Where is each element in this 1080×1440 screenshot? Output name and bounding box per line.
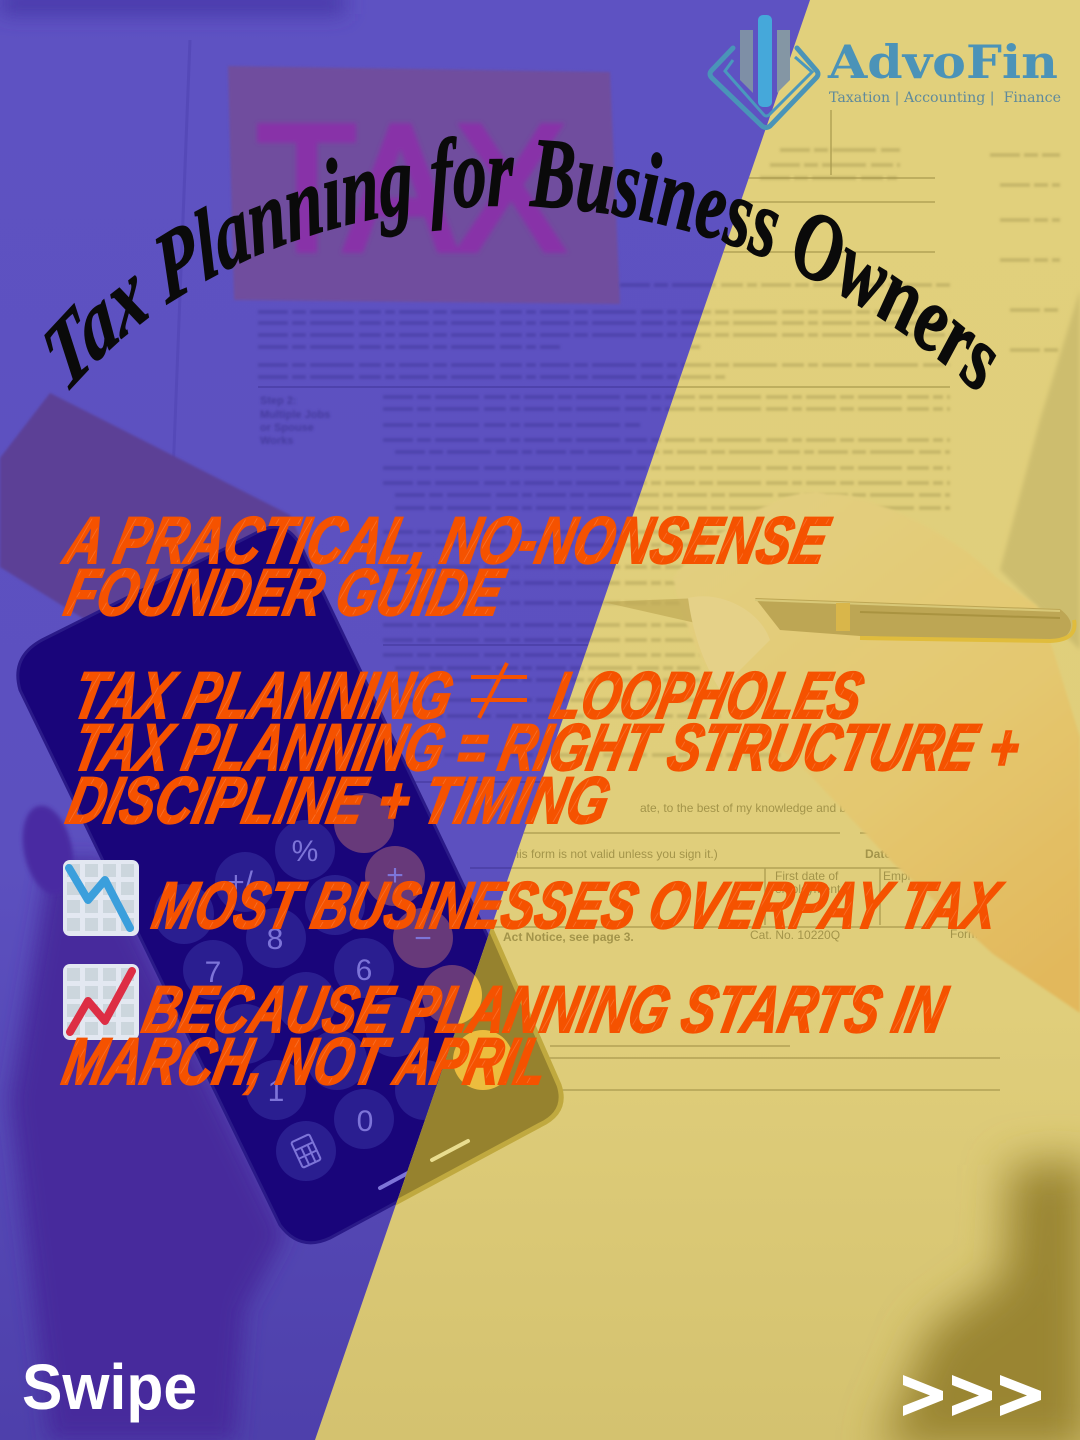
photo: form side labels <box>260 395 330 447</box>
icon: chart decreasing <box>63 860 139 936</box>
photo: form text: Empl <box>883 869 910 883</box>
logo mark <box>710 15 818 128</box>
photo: credit card <box>0 393 310 624</box>
photo: phone: 0 <box>357 1105 373 1138</box>
photo: shadow in corner <box>880 1160 1080 1440</box>
text block: tax planning definition: DISCIPLINE + TIMING <box>61 765 616 838</box>
photo: phone: 7 <box>205 956 221 989</box>
photo: form lines <box>258 283 712 757</box>
photo: phone: − <box>414 922 432 955</box>
panel: yellow photo side <box>315 0 1080 1440</box>
photo: form side labels: or Spouse <box>260 422 314 434</box>
icon: chart increasing <box>63 964 139 1040</box>
photo: form lines <box>560 148 1060 758</box>
photo: form text <box>503 801 978 944</box>
photo: phone edge <box>396 929 564 1206</box>
photo: form side labels: Works <box>260 435 293 447</box>
swipe label: Swipe <box>22 1351 197 1423</box>
photo: phone <box>16 526 488 1244</box>
panel: purple photo side <box>0 0 712 1440</box>
photo: tax sign: TAX <box>256 88 566 289</box>
text block: tax planning definition: LOOPHOLES <box>545 660 869 733</box>
photo: hand holding phone <box>10 801 285 1440</box>
text block: because planning starts in march: MARCH, NOT APRIL <box>57 1026 554 1099</box>
photo: form text: Act Notice, see page 3. <box>503 930 634 944</box>
photo: form text: employment <box>775 882 841 896</box>
photo: form text: This form is not valid unless you sign it.) <box>505 847 718 861</box>
subtitle: founder guide: FOUNDER GUIDE <box>59 557 511 630</box>
photo: form text: ate, to the best of my knowledge and belief, is <box>640 801 883 815</box>
photo: phone: 8 <box>267 923 283 956</box>
photo: hand with pen <box>603 492 1080 1013</box>
photo: phone: 6 <box>356 954 372 987</box>
logo tagline: Taxation | Accounting | Finance <box>829 90 1061 106</box>
photo: form text: Cat. No. 10220Q <box>750 928 840 942</box>
arrow: swipe chevrons <box>903 1375 1041 1416</box>
subtitle: founder guide: A PRACTICAL, NO-NONSENSE <box>57 505 836 578</box>
text block: tax planning definition <box>61 660 1026 838</box>
photo: form text: Form <box>950 927 978 941</box>
photo: phone: + <box>386 859 404 892</box>
photo: form text: Date <box>865 847 891 861</box>
photo: form side labels: Step 2: <box>260 395 297 407</box>
photo: form side labels: Multiple Jobs <box>260 409 330 421</box>
logo: AdvoFin <box>710 15 1061 128</box>
text block: tax planning definition: TAX PLANNING <box>67 660 459 733</box>
photo: phone: +/- <box>227 866 263 899</box>
logo wordmark: AdvoFin <box>827 35 1058 89</box>
photo: phone: 1 <box>268 1075 284 1108</box>
photo: form text: First date of <box>775 869 839 883</box>
photo: phone: % <box>292 835 318 868</box>
text block: because planning starts in march <box>57 974 954 1099</box>
subtitle: founder guide <box>57 505 836 630</box>
title: Tax Planning for Business Owners <box>44 136 996 391</box>
